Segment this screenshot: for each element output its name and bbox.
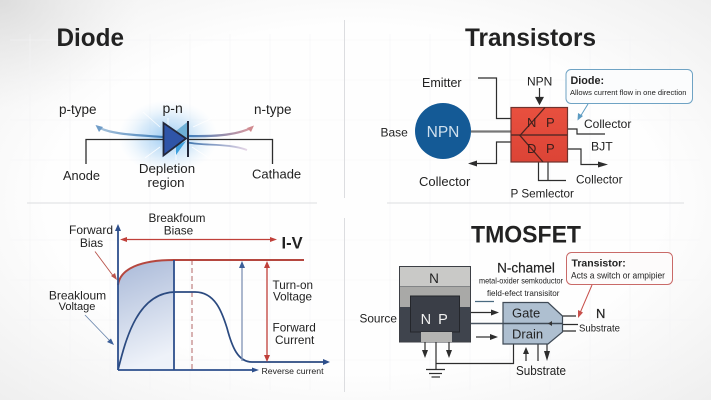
red curve [118, 260, 304, 285]
label: Source: Source [360, 312, 397, 326]
wires [425, 312, 578, 377]
label: metal-oxider semiconductor: metal-oxider semkoductor [479, 276, 563, 286]
label: Collector lower left: Collector [419, 174, 471, 189]
gate/drain block: Gate [512, 306, 540, 320]
label: Breakfoum Biase: Biase [164, 224, 194, 238]
light rays [143, 112, 217, 160]
base connection [471, 130, 511, 133]
arrow: red vertical double [264, 261, 270, 362]
gate/drain block: Drain [512, 326, 543, 342]
heading: TMOSFET: TMOSFET [471, 222, 581, 248]
label: Depletion region: Depletion [139, 161, 195, 176]
callout: transistor: Acts a switch or ampipier [571, 270, 665, 280]
panel: TMOSFET [360, 222, 672, 378]
label: Base: Base [380, 126, 408, 140]
area under curve [118, 260, 174, 370]
glow behind diode symbol [118, 100, 218, 174]
arrow: forward bias pointer [95, 252, 117, 280]
label: p-n: p-n [162, 100, 183, 116]
callout: diode: Diode: [570, 75, 604, 87]
transistor block [511, 108, 568, 162]
callout: transistor [566, 252, 672, 318]
dashed marker [191, 260, 193, 370]
arrow: breakdown voltage pointer [85, 315, 114, 345]
callout: transistor: Transistor: [572, 258, 626, 270]
label: Breakloum Voltage: Voltage [59, 301, 95, 313]
heading: Transistors: Transistors [465, 24, 596, 52]
label: BJT: BJT [591, 140, 613, 154]
label: N: N [596, 306, 605, 321]
transistor block: N [527, 115, 536, 130]
label: p-type: p-type [59, 102, 97, 117]
label: Substrate right: Substrate [579, 322, 620, 334]
label: field-effect transistor: field-efect transisitor [487, 288, 560, 298]
label: Forward Current: Current [275, 333, 315, 347]
transistor block: P [546, 141, 555, 156]
icon: diode symbol [164, 121, 188, 157]
arrowheads [422, 310, 550, 361]
heading: Diode: Diode [56, 24, 124, 52]
wires [474, 78, 605, 180]
arrow: blue vertical [239, 261, 245, 361]
label: Substrate bottom: Substrate [516, 364, 566, 378]
label: n-type: n-type [254, 102, 292, 117]
label: Depletion region: region [148, 175, 184, 190]
label: Breakloum Voltage: Breakloum [49, 288, 106, 302]
icon: NPN circle: NPN [427, 124, 459, 141]
callout: diode: Allows current flow in one direction [570, 88, 686, 97]
panel: transistors [380, 24, 692, 200]
transistor block: P [546, 115, 555, 130]
label: Anode: Anode [63, 168, 100, 183]
label: P Semlector: P Semlector [510, 188, 574, 200]
arrow: red horizontal double [120, 237, 277, 242]
label: N-chamel: N-chamel [497, 260, 555, 276]
short accent bar [475, 300, 494, 302]
MOSFET cross-section: N [429, 271, 439, 286]
arrow: NPN [536, 88, 543, 104]
current flow arrows [96, 125, 254, 150]
gate/drain block [503, 302, 562, 344]
label: Collector upper right: Collector [584, 117, 631, 131]
label: Emitter: Emitter [422, 76, 462, 90]
arrow: collector left [468, 160, 477, 166]
label: Forward Current: Forward [272, 320, 316, 334]
label: I-V: I-V [282, 234, 303, 252]
arrow: collector right [598, 162, 608, 168]
label: Turn-on Voltage: Turn-on [272, 279, 313, 292]
label: Forward Bias: Bias [80, 236, 103, 250]
label: Forward Bias: Forward [69, 223, 113, 237]
blue curve [118, 292, 325, 370]
icon: NPN circle [415, 103, 471, 159]
MOSFET cross-section [400, 266, 470, 342]
transistor block: D [527, 141, 536, 156]
label: Reverse current: Reverse current [262, 367, 324, 376]
axes [115, 224, 330, 372]
MOSFET cross-section: N P [421, 312, 449, 328]
label: Collector lower right: Collector [576, 172, 623, 186]
label: NPN: NPN [527, 74, 552, 88]
panel: diode [56, 24, 301, 190]
panel: I-V chart [49, 211, 330, 376]
circuit wires [86, 140, 272, 164]
label: Turn-on Voltage: Voltage [273, 290, 312, 304]
label: Cathade: Cathade [252, 166, 301, 182]
label: Breakfoum Biase: Breakfoum [148, 211, 206, 225]
callout: diode [566, 70, 692, 120]
